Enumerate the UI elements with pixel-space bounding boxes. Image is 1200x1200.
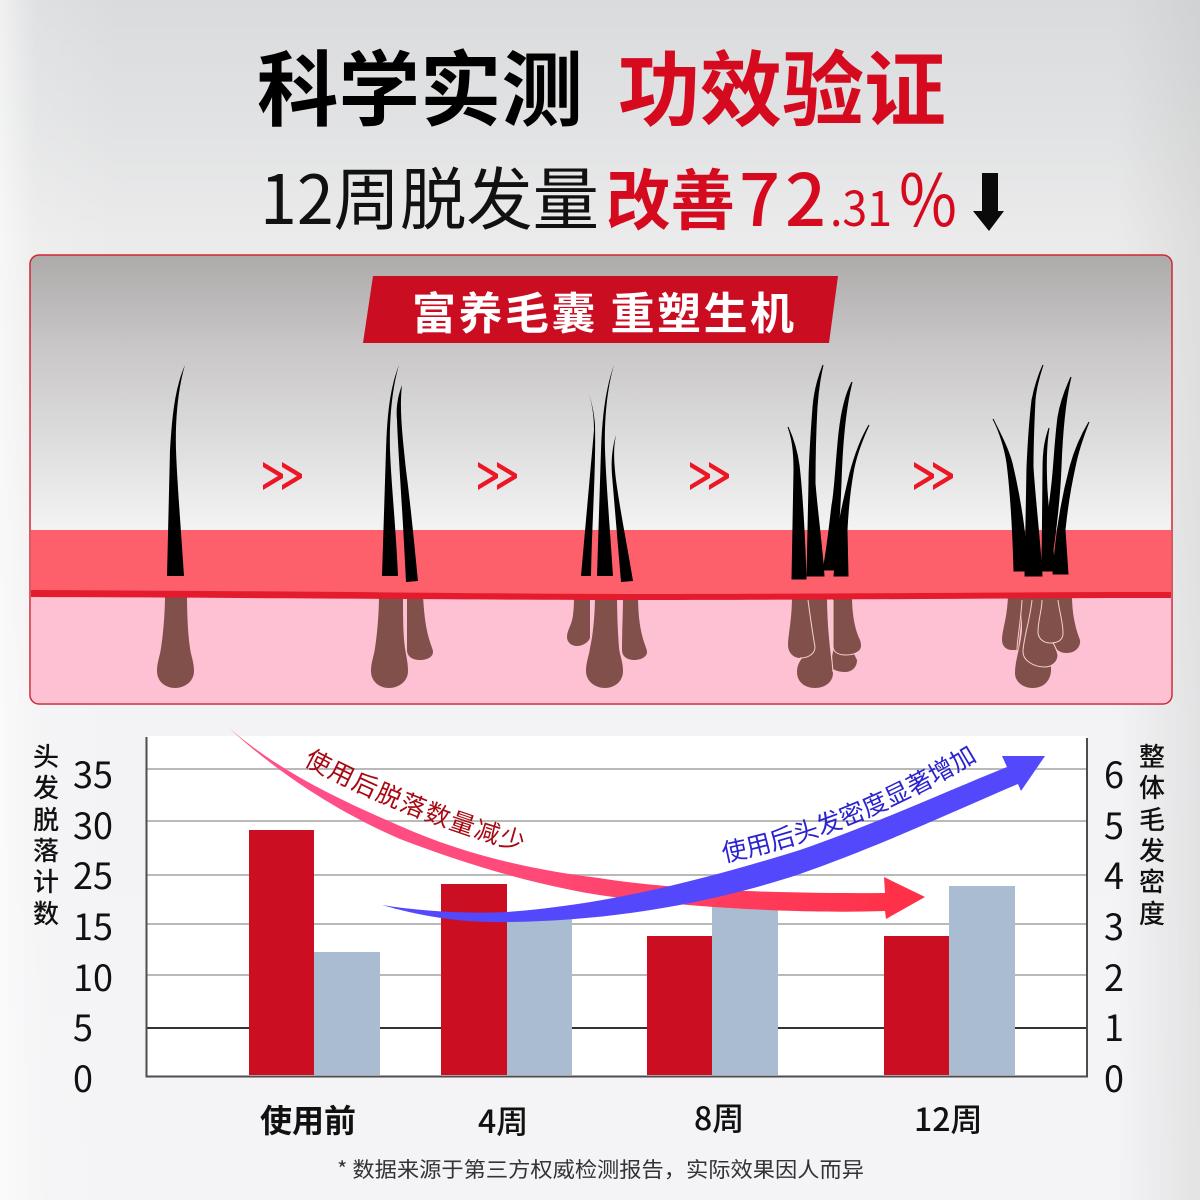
density bar	[712, 905, 778, 1075]
follicle outlines	[800, 600, 858, 672]
right axis numbers: 1	[1104, 1000, 1124, 1052]
left axis numbers: 0	[73, 1051, 93, 1103]
plot area	[147, 736, 1087, 1076]
bars: week 8	[647, 905, 778, 1075]
hair strands	[382, 365, 418, 582]
left axis numbers: 5	[73, 1000, 93, 1052]
hair loss bar	[249, 830, 314, 1075]
hair loss bar	[647, 936, 712, 1075]
right axis numbers: 0	[1104, 1051, 1124, 1103]
hair loss bar	[441, 884, 507, 1075]
right axis title: 密	[1139, 862, 1165, 899]
right axis title: 毛	[1139, 800, 1165, 837]
label: week 12: 12周	[914, 1095, 982, 1141]
right axis numbers: 4	[1104, 848, 1124, 900]
density bar	[314, 952, 380, 1075]
blue arrow label: 使用后头发密度显著增加	[722, 746, 977, 864]
arrow 2	[478, 462, 517, 490]
right axis title: 体	[1139, 768, 1165, 805]
hair strands	[788, 365, 869, 579]
subtitle: red improvement figure	[606, 142, 957, 247]
bars: before use	[249, 830, 380, 1075]
left axis title: 计	[33, 862, 59, 899]
left axis numbers: 35	[73, 747, 113, 799]
subtitle: red improvement figure: 72	[739, 142, 826, 247]
arrow 4	[914, 462, 953, 490]
banner shape	[363, 276, 838, 343]
arrow 1	[263, 462, 302, 490]
subtitle: black part: 12周脱发量	[260, 145, 599, 244]
subtitle	[260, 142, 1004, 247]
left axis title: 发	[33, 768, 59, 805]
label: week 4: 4周	[478, 1097, 528, 1143]
panel: hair growth stages	[30, 255, 1172, 704]
panel border	[30, 255, 1172, 704]
left axis numbers: 15	[73, 899, 113, 951]
chart	[33, 728, 1165, 1143]
label: week 8: 8周	[694, 1094, 744, 1140]
panel background	[30, 255, 1172, 704]
stage 3 hair	[567, 365, 647, 688]
right axis numbers: 3	[1104, 899, 1124, 951]
hair strands	[581, 365, 633, 582]
axes	[146, 737, 1087, 1076]
right axis title: 度	[1139, 894, 1165, 931]
arrows between stages	[263, 462, 953, 490]
blue trend arrow	[382, 756, 1045, 922]
arrow 3	[690, 462, 729, 490]
bars: week 4	[441, 884, 572, 1075]
follicle	[157, 595, 194, 688]
title: black part: 科学实测	[257, 24, 583, 143]
left axis title: 脱	[33, 800, 59, 837]
stage 5 hair	[993, 365, 1089, 688]
hair strands	[993, 365, 1089, 576]
density bar	[507, 918, 572, 1075]
hair strand	[167, 365, 185, 576]
lower skin	[31, 596, 1171, 703]
subtitle: red improvement figure: .31	[830, 170, 892, 240]
icon: down arrow	[973, 173, 1004, 231]
right axis title: 整	[1139, 737, 1165, 774]
skin band	[31, 530, 1171, 596]
grid lines	[147, 769, 1086, 1028]
title: red part: 功效验证	[618, 24, 946, 143]
stage 2 hair	[371, 365, 433, 688]
follicles	[567, 595, 647, 688]
follicle outlines	[1017, 600, 1063, 667]
banner	[363, 276, 838, 343]
subtitle: red improvement figure: 改善	[606, 148, 735, 244]
left axis numbers: 25	[73, 848, 113, 900]
banner text: 富养毛囊 重塑生机	[412, 278, 794, 342]
left axis title: 落	[33, 831, 59, 868]
skin line	[31, 590, 1171, 600]
left axis title: 数	[33, 894, 59, 931]
stage 4 hair	[788, 365, 869, 688]
stage 1 hair	[157, 365, 194, 688]
follicles	[788, 596, 861, 688]
footnote: * 数据来源于第三方权威检测报告，实际效果因人而异	[337, 1154, 864, 1184]
red trend arrow	[229, 728, 925, 919]
title	[257, 24, 946, 143]
follicles	[371, 595, 433, 688]
right axis numbers: 6	[1104, 747, 1124, 799]
left axis numbers: 10	[73, 950, 113, 1002]
left axis numbers: 30	[73, 798, 113, 850]
red arrow label: 使用后脱落数量减少	[306, 748, 524, 848]
density bar	[949, 886, 1015, 1075]
x axis labels	[260, 1094, 982, 1143]
right axis numbers: 5	[1104, 798, 1124, 850]
bars: week 12	[884, 886, 1015, 1075]
follicles	[1002, 596, 1080, 688]
label: before use: 使用前	[260, 1096, 356, 1142]
left axis title: 头	[33, 737, 59, 774]
right axis numbers: 2	[1104, 950, 1124, 1002]
subtitle: red improvement figure: %	[899, 142, 957, 247]
hair loss bar	[884, 936, 949, 1075]
right axis title: 发	[1139, 831, 1165, 868]
